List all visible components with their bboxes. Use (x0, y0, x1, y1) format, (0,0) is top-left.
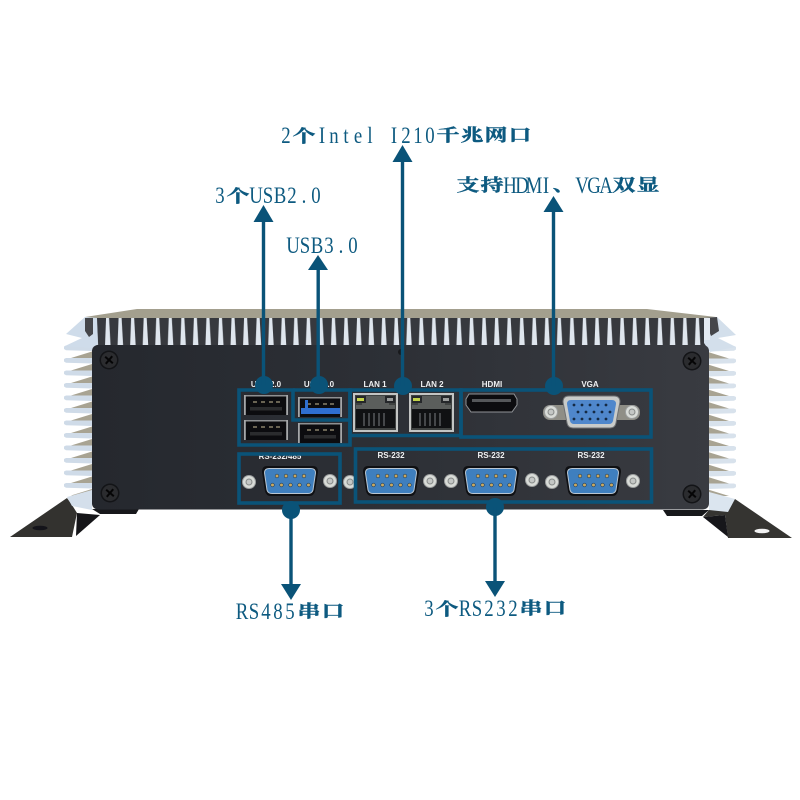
front panel (92, 345, 709, 510)
label: USB 2.0 ports: 3 (215, 182, 225, 209)
label: RS485 serial port: RS485 (236, 598, 295, 625)
label: Intel I210 LAN ports: 千兆网口 (437, 126, 531, 145)
label: RS232 serial ports: RS232 (459, 595, 518, 622)
RS-232 ports (363, 466, 640, 496)
label: Intel I210 LAN ports (281, 122, 531, 149)
arrow: RS232 (485, 498, 505, 597)
top heat-sink fins (92, 318, 709, 346)
arrow: HDMI and VGA (544, 196, 564, 395)
computer chassis photo (10, 309, 792, 538)
label: RS485 serial port (236, 598, 344, 625)
HDMI port (466, 394, 517, 412)
label: HDMI and VGA dual display: VGA (575, 172, 613, 199)
label: USB 2.0 ports: USB2.0 (249, 182, 321, 209)
top heat-sink band (85, 309, 716, 320)
RS-485 port (242, 466, 357, 496)
left foot (10, 490, 139, 537)
port labels: RS-232/485 (259, 452, 302, 461)
left side fins (64, 346, 93, 496)
label: USB 2.0 ports (215, 182, 321, 209)
port labels (251, 380, 605, 461)
port labels: RS-232 (477, 451, 505, 460)
LAN ports (353, 393, 454, 432)
left top corner (65, 317, 98, 348)
label: Intel I210 LAN ports: 2 (281, 122, 291, 149)
arrow: RS485 (281, 501, 301, 600)
port labels: LAN 2 (420, 380, 444, 389)
label: RS232 serial ports (424, 595, 566, 622)
label: Intel I210 LAN ports: 个 (293, 127, 315, 146)
label: HDMI and VGA dual display: 、 (553, 177, 575, 195)
label: RS485 serial port: 串口 (298, 602, 344, 621)
panel screws (100, 349, 702, 504)
arrow: USB 3.0 (308, 255, 328, 394)
label: RS232 serial ports: 串口 (520, 599, 566, 618)
label: Intel I210 LAN ports: Intel I210 (319, 122, 435, 149)
port labels: USB 3.0 (304, 380, 335, 389)
VGA port (543, 396, 640, 428)
port labels: USB 2.0 (251, 380, 282, 389)
port labels: RS-232 (377, 451, 405, 460)
port labels: RS-232 (577, 451, 605, 460)
port labels: LAN 1 (363, 380, 387, 389)
highlight frames (239, 390, 652, 503)
label: HDMI and VGA dual display (457, 172, 659, 199)
label: USB 2.0 ports: 个 (227, 187, 249, 206)
label: HDMI and VGA dual display: HDMI (503, 172, 549, 199)
right foot (663, 492, 792, 538)
label: HDMI and VGA dual display: 双显 (613, 176, 659, 195)
arrow: Intel I210 LAN (392, 145, 412, 395)
right side fins (708, 346, 736, 496)
arrow: USB 2.0 (254, 205, 274, 394)
label: HDMI and VGA dual display: 支持 (457, 176, 503, 195)
label: RS232 serial ports: 3 (424, 595, 434, 622)
label: RS232 serial ports: 个 (436, 600, 458, 619)
label: USB 3.0 port: USB3.0 (286, 232, 358, 259)
port labels: HDMI (482, 380, 502, 389)
right top corner (704, 317, 736, 352)
port labels: VGA (581, 380, 599, 389)
USB 3.0 ports (298, 397, 342, 443)
USB 2.0 ports (244, 395, 288, 440)
